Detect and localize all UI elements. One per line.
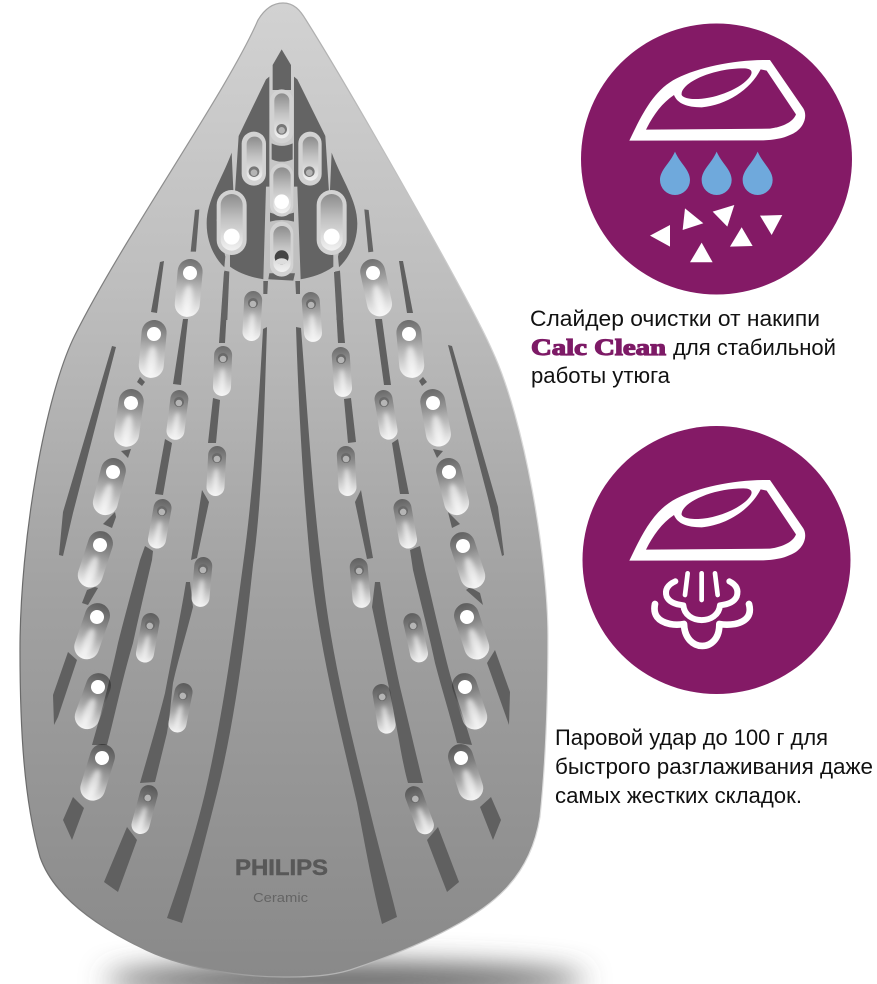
dark grooves bbox=[53, 261, 510, 924]
large vent holes right bbox=[358, 257, 492, 804]
text: steam boost description: быстрого разглаживания даже bbox=[555, 754, 873, 779]
large vent holes left bbox=[71, 258, 204, 804]
icon: water drops bbox=[660, 152, 773, 195]
icon: calc clean badge bbox=[581, 24, 852, 294]
label: Ceramic: Ceramic bbox=[253, 890, 309, 905]
text: calc clean description bbox=[530, 306, 836, 388]
brand: PHILIPS: PHILIPS bbox=[235, 855, 328, 880]
soleplate outline bbox=[20, 3, 548, 977]
icon: scale particles bbox=[650, 205, 782, 262]
text: steam boost description: самых жестких складок. bbox=[555, 783, 802, 808]
text: calc clean description: Calc Clean bbox=[531, 335, 666, 360]
icon: steam boost badge bbox=[582, 426, 850, 694]
small vent holes left bbox=[129, 291, 263, 836]
text: calc clean description: для стабильной bbox=[673, 335, 836, 360]
text: steam boost description: Паровой удар до 100 г для bbox=[555, 725, 828, 750]
top vent cluster bbox=[191, 49, 373, 320]
text: calc clean description: работы утюга bbox=[531, 363, 671, 388]
text: calc clean description: Слайдер очистки от накипи bbox=[530, 306, 820, 331]
icon: steam bbox=[654, 573, 750, 646]
iron soleplate bbox=[20, 3, 548, 977]
text: steam boost description bbox=[555, 725, 873, 808]
iron soleplate shadow bbox=[105, 964, 585, 984]
small vent holes right bbox=[301, 291, 436, 837]
